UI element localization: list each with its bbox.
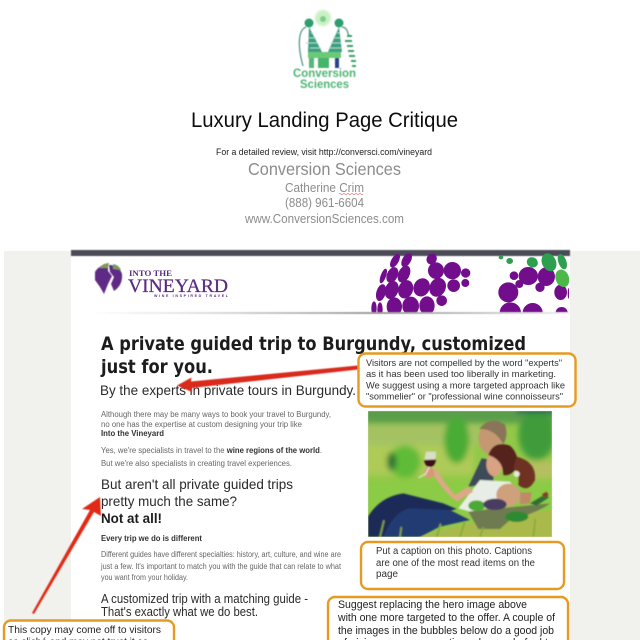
callout: copy tone: This copy may come off to visitors: [8, 624, 161, 636]
header shadow line: [90, 312, 570, 314]
callout: copy tone: [4, 620, 174, 640]
callout: hero image suggestion: [328, 597, 568, 640]
body copy: Yes, we're specialists in travel to the wine regions of the world.: [101, 446, 322, 455]
callout: experts: Visitors are not compelled by the word "experts": [366, 357, 562, 368]
body copy: Although there may be many ways to book your travel to Burgundy,: [101, 410, 331, 419]
top bar: [71, 250, 570, 256]
callout: hero image suggestion: Suggest replacing the hero image above: [338, 599, 527, 611]
brand logo: Into the Vineyard: [95, 263, 229, 298]
every trip copy: you want from your holiday.: [101, 573, 188, 582]
callout: photo caption: Put a caption on this photo. Captions: [376, 546, 532, 557]
basket: [468, 503, 550, 529]
brand logo: Into the Vineyard: WINE INSPIRED TRAVEL: [154, 294, 229, 298]
every trip copy: Different guides have different specialties: history, art, culture, and wine are: [101, 550, 341, 559]
callout: hero image suggestion: the images in the bubbles below do a good job: [338, 625, 554, 637]
arrow: experts callout: [177, 366, 358, 392]
woman jeans: [383, 508, 470, 537]
question heading: Not at all!: [101, 510, 162, 526]
logo: Conversion Sciences: Sciences: [300, 79, 349, 91]
callout: photo caption: are one of the most read items on the: [376, 558, 535, 569]
customized trip heading: [101, 591, 308, 619]
photo: couple in vineyard: [368, 410, 552, 538]
callout: experts: "sommelier" or "professional wine connoisseurs": [366, 390, 563, 402]
every trip copy: [100, 534, 342, 582]
woman top: [458, 480, 517, 512]
man head: [479, 422, 503, 454]
callout: photo caption: [361, 542, 564, 589]
screenshot backdrop: [4, 251, 640, 640]
main heading: [100, 333, 526, 378]
contact block: [216, 147, 432, 226]
logo: Conversion Sciences: [293, 10, 356, 91]
body copy: Into the Vineyard: [101, 429, 164, 438]
body copy: no one has the expertise at custom designing your trip like: [101, 420, 302, 429]
question heading: [101, 476, 293, 526]
customized trip heading: A customized trip with a matching guide -: [101, 591, 308, 606]
callout: experts: We suggest using a more targeted approach like: [366, 380, 565, 390]
body copy: [101, 410, 331, 468]
woman arm: [432, 470, 473, 502]
grass over legs: [380, 519, 535, 537]
main heading: A private guided trip to Burgundy, customized: [101, 333, 526, 355]
callout: hero image suggestion: with one more targeted to the offer. A couple of: [337, 612, 556, 624]
landing page panel: [71, 251, 570, 640]
question heading: But aren't all private guided trips: [101, 476, 293, 492]
woman hair: [488, 444, 517, 475]
man jeans: [368, 493, 457, 537]
callout: experts: [358, 354, 576, 406]
contact block: www.ConversionSciences.com: [244, 212, 404, 226]
man arm: [520, 492, 532, 504]
contact block: (888) 961-6604: [285, 196, 364, 210]
wine glass: [425, 452, 436, 467]
callout: experts: as it has been used too liberally in marketing.: [366, 368, 556, 379]
logo: Conversion Sciences: Conversion: [293, 68, 356, 80]
subheading: By the experts in private tours in Burgundy.: [100, 382, 356, 398]
brand logo: Into the Vineyard: INTO THE: [129, 269, 172, 278]
main heading: just for you.: [100, 356, 213, 378]
arrow: copy callout: [32, 497, 101, 614]
customized trip heading: That's exactly what we do best.: [101, 604, 258, 619]
body copy: But we're also specialists in creating travel experiences.: [101, 459, 292, 468]
contact block: Conversion Sciences: [248, 159, 401, 179]
man torso: [468, 458, 493, 487]
every trip copy: Every trip we do is different: [101, 534, 202, 543]
title: Luxury Landing Page Critique: [191, 109, 458, 132]
contact block: For a detailed review, visit http://conversci.com/vineyard: [216, 147, 432, 157]
callout: photo caption: page: [376, 569, 398, 580]
header grape bubbles: [371, 253, 569, 312]
contact block: Catherine Crim: [285, 181, 364, 195]
woman shoulder: [496, 484, 520, 506]
every trip copy: just a few. It's important to match you with the guide that can relate to what: [100, 562, 342, 571]
woman face: [486, 452, 502, 476]
question heading: pretty much the same?: [101, 493, 237, 509]
brand logo: Into the Vineyard: VINEYARD: [128, 276, 228, 297]
